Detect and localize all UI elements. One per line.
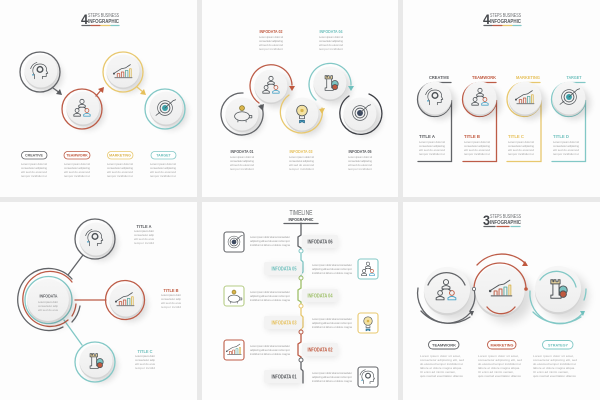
column: target: elit sed do eiusmod [553,148,579,152]
label pills: MARKETING [490,342,514,348]
text: title C: consectetur adip [135,358,155,362]
description text: tempor incididunt ut [64,174,90,178]
node: infodata 05 target [340,94,382,136]
heading and text: infodata 04: consectetur adipiscing [319,39,343,43]
description text: Lorem ipsum dolor sit [21,162,47,166]
text: title C: TITLE C [138,349,153,354]
column: target: TITLE D [553,134,570,139]
label pills [428,340,573,349]
timeline descriptions: adipiscing elit sed do eiusmod tempor [250,294,290,298]
heading and text: infodata 05: INFODATA 05 [348,149,372,154]
description text: Lorem ipsum dolor sit [150,162,176,166]
descriptions: Lorem ipsum dolor sit amet, [478,354,519,358]
descriptions: labore et dolore magna aliqua. [478,366,520,370]
description text: elit sed do eiusmod [150,170,176,174]
text: title C: tempor incidid [135,366,155,370]
central hub with rings: consectetur adip [38,304,58,308]
descriptions: Ut enim ad minim veniam, [420,370,456,374]
step circle: target [145,89,188,130]
text: title A: elit sed do eius [134,237,154,241]
node: infodata 02 people [250,65,295,108]
descriptions: Lorem ipsum dolor sit amet, [420,354,461,358]
heading and text: infodata 05 [348,149,372,171]
column: marketing: MARKETING [516,75,540,80]
heading and text: infodata 02: consectetur adipiscing [259,39,283,43]
column: target: tempor incididunt ut [553,152,579,156]
central hub with rings: Lorem ipsum dolor [38,300,58,304]
descriptions: consectetur adipiscing elit, sed [478,358,522,362]
column: target [552,75,590,162]
text: title B: tempor incidid [161,305,181,309]
heading and text: infodata 04: tempor incididunt [319,47,343,51]
label pills: CREATIVE [25,154,44,158]
heading and text: infodata 03: consectetur adipiscing [289,159,314,163]
title: 4 steps business infographic [81,11,119,27]
heading and text: infodata 04 [319,29,343,51]
heading and text: infodata 03: tempor incididunt [289,167,314,171]
text: title C: Lorem ipsum dolor [135,354,155,358]
column: creative: TITLE A [419,134,436,139]
text: title A: tempor incidid [134,241,154,245]
column: teamwork: TEAMWORK [472,75,497,80]
description text: tempor incididunt ut [107,174,133,178]
timeline descriptions: adipiscing elit sed do eiusmod tempor [250,348,290,352]
panel: timeline [224,210,378,387]
column: target: consectetur adipiscing [553,144,579,148]
column: teamwork: consectetur adipiscing [464,144,490,148]
column: teamwork: Lorem ipsum dolor sit [464,140,490,144]
descriptions [420,354,577,378]
central hub with rings [18,268,80,330]
node: title C [75,342,118,382]
label pills: MARKETING [109,154,131,158]
central hub with rings: INFODATA [40,294,58,298]
heading and text: infodata 02: tempor incididunt [259,47,283,51]
timeline descriptions: adipiscing elit sed do eiusmod tempor [312,267,352,271]
column: marketing: elit sed do eiusmod [508,148,534,152]
heading and text: infodata 01: tempor incididunt [230,167,254,171]
step circle: teamwork [62,87,104,130]
column: teamwork [463,75,502,162]
heading and text: infodata 01: Lorem ipsum dolor sit [230,155,254,159]
heading and text: infodata 05: tempor incididunt [348,167,372,171]
column: creative: consectetur adipiscing [419,144,445,148]
node: infodata 04 tower [309,63,354,104]
timeline descriptions: Lorem ipsum dolor sit amet consectetur [312,371,352,375]
node: infodata 01 piggy bank [221,93,264,136]
descriptions: consectetur adipiscing elit, sed [533,358,577,362]
panel: 4 steps circles [20,11,188,178]
heading and text: infodata 05: consectetur adipiscing [348,159,372,163]
title: 3 steps business infographic: INFOGRAPHIC [490,220,521,226]
description text: consectetur adipiscing [21,166,47,170]
label pills: TEAMWORK [432,342,456,348]
panel: hub and spokes [18,219,182,382]
descriptions: Ut enim ad minim veniam, [478,370,514,374]
column: creative: CREATIVE [429,75,449,80]
step circle: marketing [103,52,146,95]
step: strategy [530,266,588,324]
timeline descriptions: Lorem ipsum dolor sit amet consectetur [250,290,290,294]
description text [21,162,176,178]
connector lines [64,255,106,345]
column: creative: tempor incididunt ut [419,152,445,156]
label pills [22,152,176,159]
description text: elit sed do eiusmod [107,170,133,174]
heading and text: infodata 03: elit sed do eiusmod [289,163,314,167]
column: teamwork: tempor incididunt ut [464,152,490,156]
text: title B: Lorem ipsum dolor [161,293,181,297]
heading and text: infodata 03 [289,149,314,171]
heading and text: infodata 03: INFODATA 03 [290,149,313,154]
label pills: TARGET [156,154,172,158]
description text: Lorem ipsum dolor sit [64,162,90,166]
descriptions: consectetur adipiscing elit, sed [420,358,464,362]
heading and text: infodata 01: consectetur adipiscing [230,159,254,163]
column: marketing: Lorem ipsum dolor sit [508,140,534,144]
text: title A [134,224,154,245]
timeline descriptions: incididunt ut labore et dolore magna [250,243,290,247]
node: infodata 03 bulb [280,95,325,136]
step circle: creative [20,52,62,95]
title: timeline infographic [284,210,318,224]
descriptions: quis nostrud exercitation ullamco [478,374,521,378]
heading and text: infodata 02 [259,29,283,51]
title: 4 steps business infographic [483,11,521,27]
column: target: Lorem ipsum dolor sit [553,140,579,144]
column: teamwork: elit sed do eiusmod [464,148,490,152]
central hub with rings: elit sed do eius [38,308,58,312]
heading and text: infodata 04: elit sed do eiusmod [319,43,343,47]
text: title B: consectetur adip [161,297,181,301]
text: title A: TITLE A [136,224,152,229]
timeline descriptions: adipiscing elit sed do eiusmod tempor [312,375,352,379]
title: 4 steps business infographic: INFOGRAPHIC [490,19,521,25]
descriptions: quis nostrud exercitation ullamco [420,374,463,378]
descriptions: quis nostrud exercitation ullamco [533,374,576,378]
panel: infodata 01-05 wave [221,29,382,171]
column: marketing: TITLE C [508,134,525,139]
label pills: STRATEGY [548,342,568,348]
title: 4 steps business infographic: 4 [483,11,490,27]
title: 4 steps business infographic: STEPS BUSINESS [490,13,521,19]
heading and text: infodata 02: Lorem ipsum dolor sit [259,35,283,39]
node: title B [106,280,148,322]
title: 4 steps business infographic: STEPS BUSINESS [88,13,119,19]
descriptions: do eiusmod tempor incididunt ut [478,362,521,366]
timeline descriptions: Lorem ipsum dolor sit amet consectetur [250,344,290,348]
step: teamwork [418,267,477,323]
text: title B: TITLE B [164,288,179,293]
column: marketing: tempor incididunt ut [508,152,534,156]
column: marketing: consectetur adipiscing [508,144,534,148]
timeline descriptions: Lorem ipsum dolor sit amet consectetur [250,235,290,239]
timeline descriptions: adipiscing elit sed do eiusmod tempor [250,239,290,243]
title: 4 steps business infographic: INFOGRAPHIC [88,19,119,25]
column: teamwork: TITLE B [464,134,481,139]
step: marketing [472,254,532,322]
label pills: INFODATA 06 [308,240,333,246]
text: title B [161,288,182,309]
description text: consectetur adipiscing [64,166,90,170]
title: 3 steps business infographic [483,212,521,228]
title: 4 steps business infographic: 4 [81,11,88,27]
description text: tempor incididunt ut [21,174,47,178]
timeline descriptions: incididunt ut labore et dolore magna [312,271,352,275]
description text: consectetur adipiscing [107,166,133,170]
text: title A: Lorem ipsum dolor [134,229,154,233]
timeline descriptions: incididunt ut labore et dolore magna [250,298,290,302]
timeline descriptions: incididunt ut labore et dolore magna [312,325,352,329]
node: title A [75,219,118,260]
icon tiles [224,232,378,387]
title: 3 steps business infographic: STEPS BUSINESS [490,214,521,220]
timeline descriptions: Lorem ipsum dolor sit amet consectetur [312,317,352,321]
description text: elit sed do eiusmod [21,170,47,174]
descriptions: labore et dolore magna aliqua. [420,366,462,370]
label pills: TEAMWORK [66,154,88,158]
description text: elit sed do eiusmod [64,170,90,174]
timeline descriptions [250,235,352,383]
heading and text: infodata 01: INFODATA 01 [230,149,254,154]
title: timeline infographic: INFOGRAPHIC [288,217,314,222]
heading and text: infodata 04: Lorem ipsum dolor sit [319,35,343,39]
label pills [264,235,338,385]
heading and text: infodata 01 [230,149,254,171]
label pills: INFODATA 01 [272,374,297,380]
heading and text: infodata 03: Lorem ipsum dolor sit [289,155,314,159]
text: title C: elit sed do eius [135,362,156,366]
panel: 4 steps columns [418,11,590,162]
heading and text: infodata 05: Lorem ipsum dolor sit [348,155,372,159]
text: title A: consectetur adip [134,233,154,237]
description text: Lorem ipsum dolor sit [107,162,133,166]
title: timeline infographic: TIMELINE [290,210,313,217]
descriptions: Lorem ipsum dolor sit amet, [533,354,574,358]
heading and text: infodata 05: elit sed do eiusmod [348,163,372,167]
timeline spine [298,223,303,383]
description text: consectetur adipiscing [150,166,176,170]
descriptions: labore et dolore magna aliqua. [533,366,575,370]
text: title C [135,349,156,370]
label pills: INFODATA 02 [308,348,333,354]
text: title B: elit sed do eius [161,301,182,305]
timeline descriptions: Lorem ipsum dolor sit amet consectetur [312,263,352,267]
heading and text: infodata 04: INFODATA 04 [320,29,343,34]
description text: tempor incididunt ut [150,174,176,178]
descriptions: do eiusmod tempor incididunt ut [420,362,463,366]
heading and text: infodata 02: elit sed do eiusmod [259,43,283,47]
column: creative: Lorem ipsum dolor sit [419,140,445,144]
column: target: TARGET [566,75,582,80]
label pills: INFODATA 03 [272,320,297,326]
panel: 3 steps [418,212,588,378]
column: marketing [507,75,546,162]
timeline descriptions: adipiscing elit sed do eiusmod tempor [312,321,352,325]
label pills: INFODATA 05 [272,266,297,272]
descriptions: Ut enim ad minim veniam, [533,370,569,374]
timeline descriptions: incididunt ut labore et dolore magna [250,352,290,356]
timeline descriptions: incididunt ut labore et dolore magna [312,379,352,383]
column: creative [418,75,456,162]
heading and text: infodata 01: elit sed do eiusmod [230,163,254,167]
label pills: INFODATA 04 [308,294,333,300]
column: creative: elit sed do eiusmod [419,148,445,152]
descriptions: do eiusmod tempor incididunt ut [533,362,576,366]
heading and text: infodata 02: INFODATA 02 [260,29,283,34]
title: 3 steps business infographic: 3 [483,212,490,228]
